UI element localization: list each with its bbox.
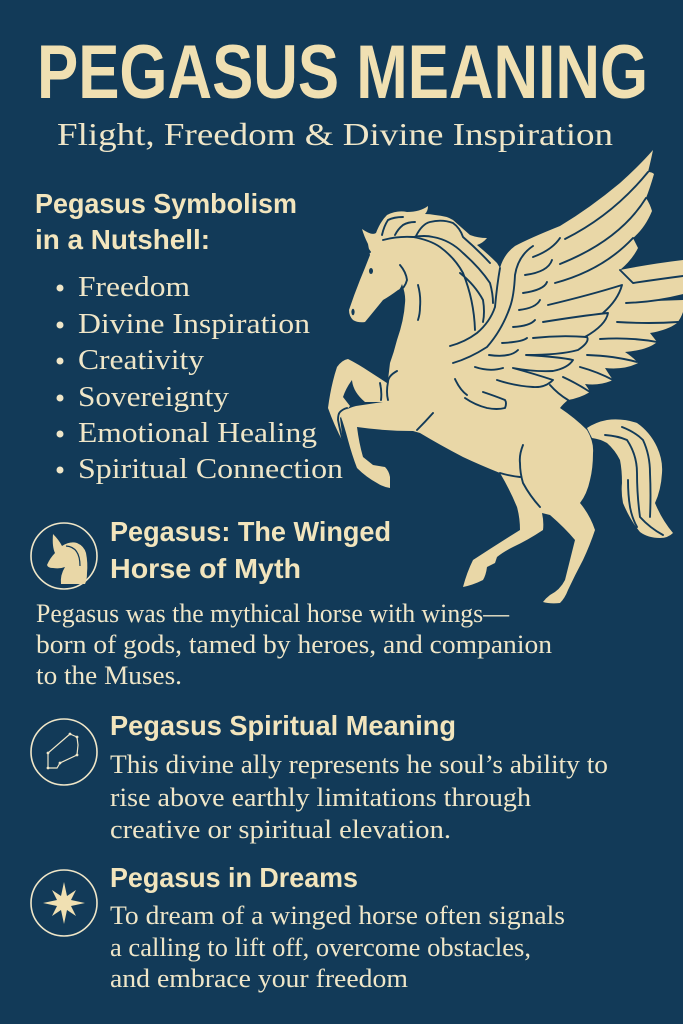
text: spiritual description: creative or spiritual elevation. bbox=[110, 815, 451, 844]
heading: spiritual meaning: Pegasus Spiritual Meaning bbox=[110, 710, 456, 741]
icon: constellation bbox=[31, 719, 97, 785]
body, head and legs bbox=[341, 206, 595, 603]
bullet list bbox=[56, 272, 343, 485]
bullet list: Emotional Healing bbox=[78, 418, 317, 449]
heading: dreams: Pegasus in Dreams bbox=[110, 862, 358, 893]
feather and contour lines bbox=[338, 172, 683, 535]
text: dreams description: To dream of a winged horse often signals bbox=[110, 901, 565, 930]
heading: winged horse: Horse of Myth bbox=[110, 553, 301, 584]
heading: symbolism bbox=[35, 188, 297, 255]
icon: star bbox=[31, 870, 97, 936]
wing bbox=[440, 150, 683, 420]
icon: unicorn head bbox=[31, 523, 97, 589]
heading: symbolism: Pegasus Symbolism bbox=[35, 188, 297, 219]
panel: symbolism list bbox=[35, 188, 343, 485]
text: spiritual description bbox=[110, 750, 608, 844]
panel: winged horse of myth bbox=[31, 516, 552, 690]
text: spiritual description: This divine ally represents he soul’s ability to bbox=[110, 750, 608, 779]
text: myth description bbox=[36, 599, 552, 690]
heading: symbolism: in a Nutshell: bbox=[35, 224, 210, 255]
far foreleg bbox=[328, 359, 390, 442]
panel: dreams bbox=[31, 862, 565, 993]
heading: winged horse: Pegasus: The Winged bbox=[110, 516, 391, 547]
text: dreams description: a calling to lift off, overcome obstacles, bbox=[110, 933, 531, 962]
text: myth description: to the Muses. bbox=[36, 661, 182, 690]
eye bbox=[369, 268, 373, 274]
heading: winged horse bbox=[110, 516, 391, 584]
panel: spiritual meaning bbox=[31, 710, 608, 844]
text: spiritual description: rise above earthly limitations through bbox=[110, 783, 531, 812]
bullet list: Spiritual Connection bbox=[78, 454, 343, 485]
subtitle: Flight, Freedom & Divine Inspiration bbox=[57, 116, 613, 152]
bullet list: Creativity bbox=[78, 345, 204, 376]
text: dreams description: and embrace your freedom bbox=[110, 964, 408, 993]
bullet list: Sovereignty bbox=[78, 382, 229, 413]
bullet list: Divine Inspiration bbox=[78, 309, 310, 340]
illustration: pegasus bbox=[328, 150, 683, 603]
text: myth description: born of gods, tamed by heroes, and companion bbox=[36, 630, 552, 659]
nostril bbox=[351, 309, 355, 315]
tail bbox=[587, 419, 673, 538]
text: myth description: Pegasus was the mythical horse with wings— bbox=[36, 599, 510, 628]
text: dreams description bbox=[110, 901, 565, 993]
bullet list: Freedom bbox=[78, 272, 190, 303]
